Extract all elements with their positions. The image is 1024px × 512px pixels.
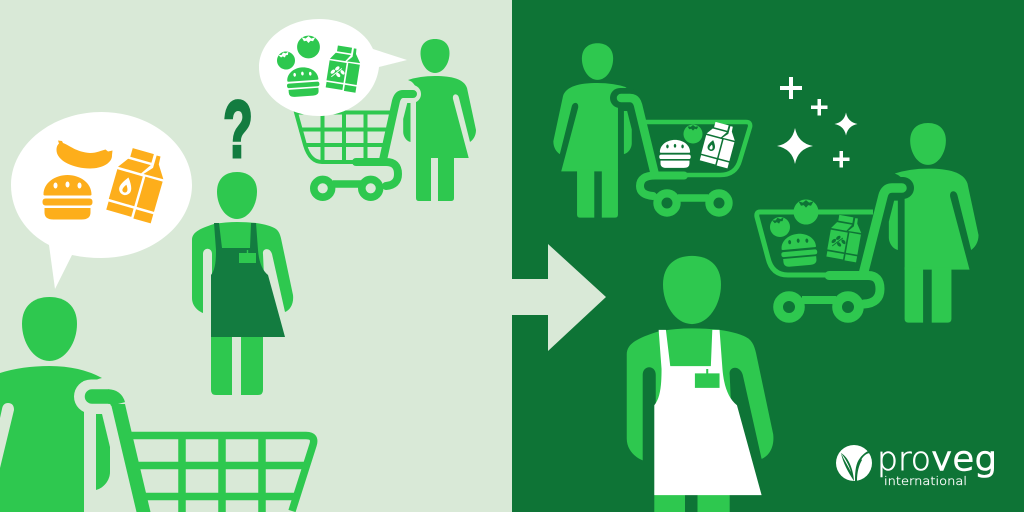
icon: burger in cart bbox=[659, 140, 691, 168]
icon: plant milk in cart bbox=[826, 214, 864, 262]
cart: small shopping cart bbox=[296, 94, 413, 197]
tagline: international bbox=[884, 474, 967, 488]
arrow bbox=[512, 244, 606, 351]
legs bbox=[211, 335, 263, 395]
icon: sausage bbox=[56, 140, 112, 168]
logo: ProVeg International bbox=[836, 439, 996, 488]
person: undecided shop worker with dark apron bbox=[192, 172, 293, 395]
person: helpful shop worker with white apron bbox=[627, 256, 773, 512]
panel: before background bbox=[0, 0, 512, 512]
speech bubble: unhealthy choices bbox=[11, 112, 192, 289]
person: shopper with grid cart, top bbox=[296, 39, 476, 201]
far arm bbox=[96, 414, 110, 490]
person: shopper with cart, foreground left bbox=[0, 297, 314, 512]
logo mark bbox=[836, 445, 872, 481]
sparkles bbox=[777, 77, 858, 168]
cart: filled cart bbox=[621, 98, 750, 213]
speech bubble: plant-based choices bbox=[259, 19, 407, 116]
wordmark: veg: veg bbox=[931, 439, 996, 478]
icon: milk carton bbox=[105, 146, 169, 223]
icon: tomato in cart bbox=[683, 124, 702, 144]
torso bbox=[0, 366, 102, 512]
question mark: ? bbox=[223, 85, 253, 175]
person: shopper with full cart, right bbox=[757, 123, 979, 323]
legs bbox=[654, 490, 730, 512]
panel: after background bbox=[512, 0, 1024, 512]
icon: tomato on top of cart bbox=[793, 200, 818, 224]
cart: filled cart bbox=[757, 188, 902, 318]
icon: burger in cart bbox=[780, 232, 818, 267]
icon: tomato in cart bbox=[768, 215, 792, 239]
upper body and apron bbox=[627, 256, 773, 495]
icon: tomato bbox=[297, 36, 320, 58]
icon: milk carton in cart bbox=[699, 120, 738, 168]
icon: small tomato bbox=[274, 49, 298, 72]
head bbox=[22, 297, 77, 361]
icon: burger bbox=[286, 66, 320, 97]
icon: burger bbox=[42, 175, 92, 220]
wordmark: pro: pro bbox=[877, 439, 931, 478]
person: shopper with full cart, top right panel bbox=[553, 43, 750, 218]
icon: plant milk carton bbox=[325, 45, 362, 93]
cart: large shopping cart bbox=[92, 396, 314, 512]
